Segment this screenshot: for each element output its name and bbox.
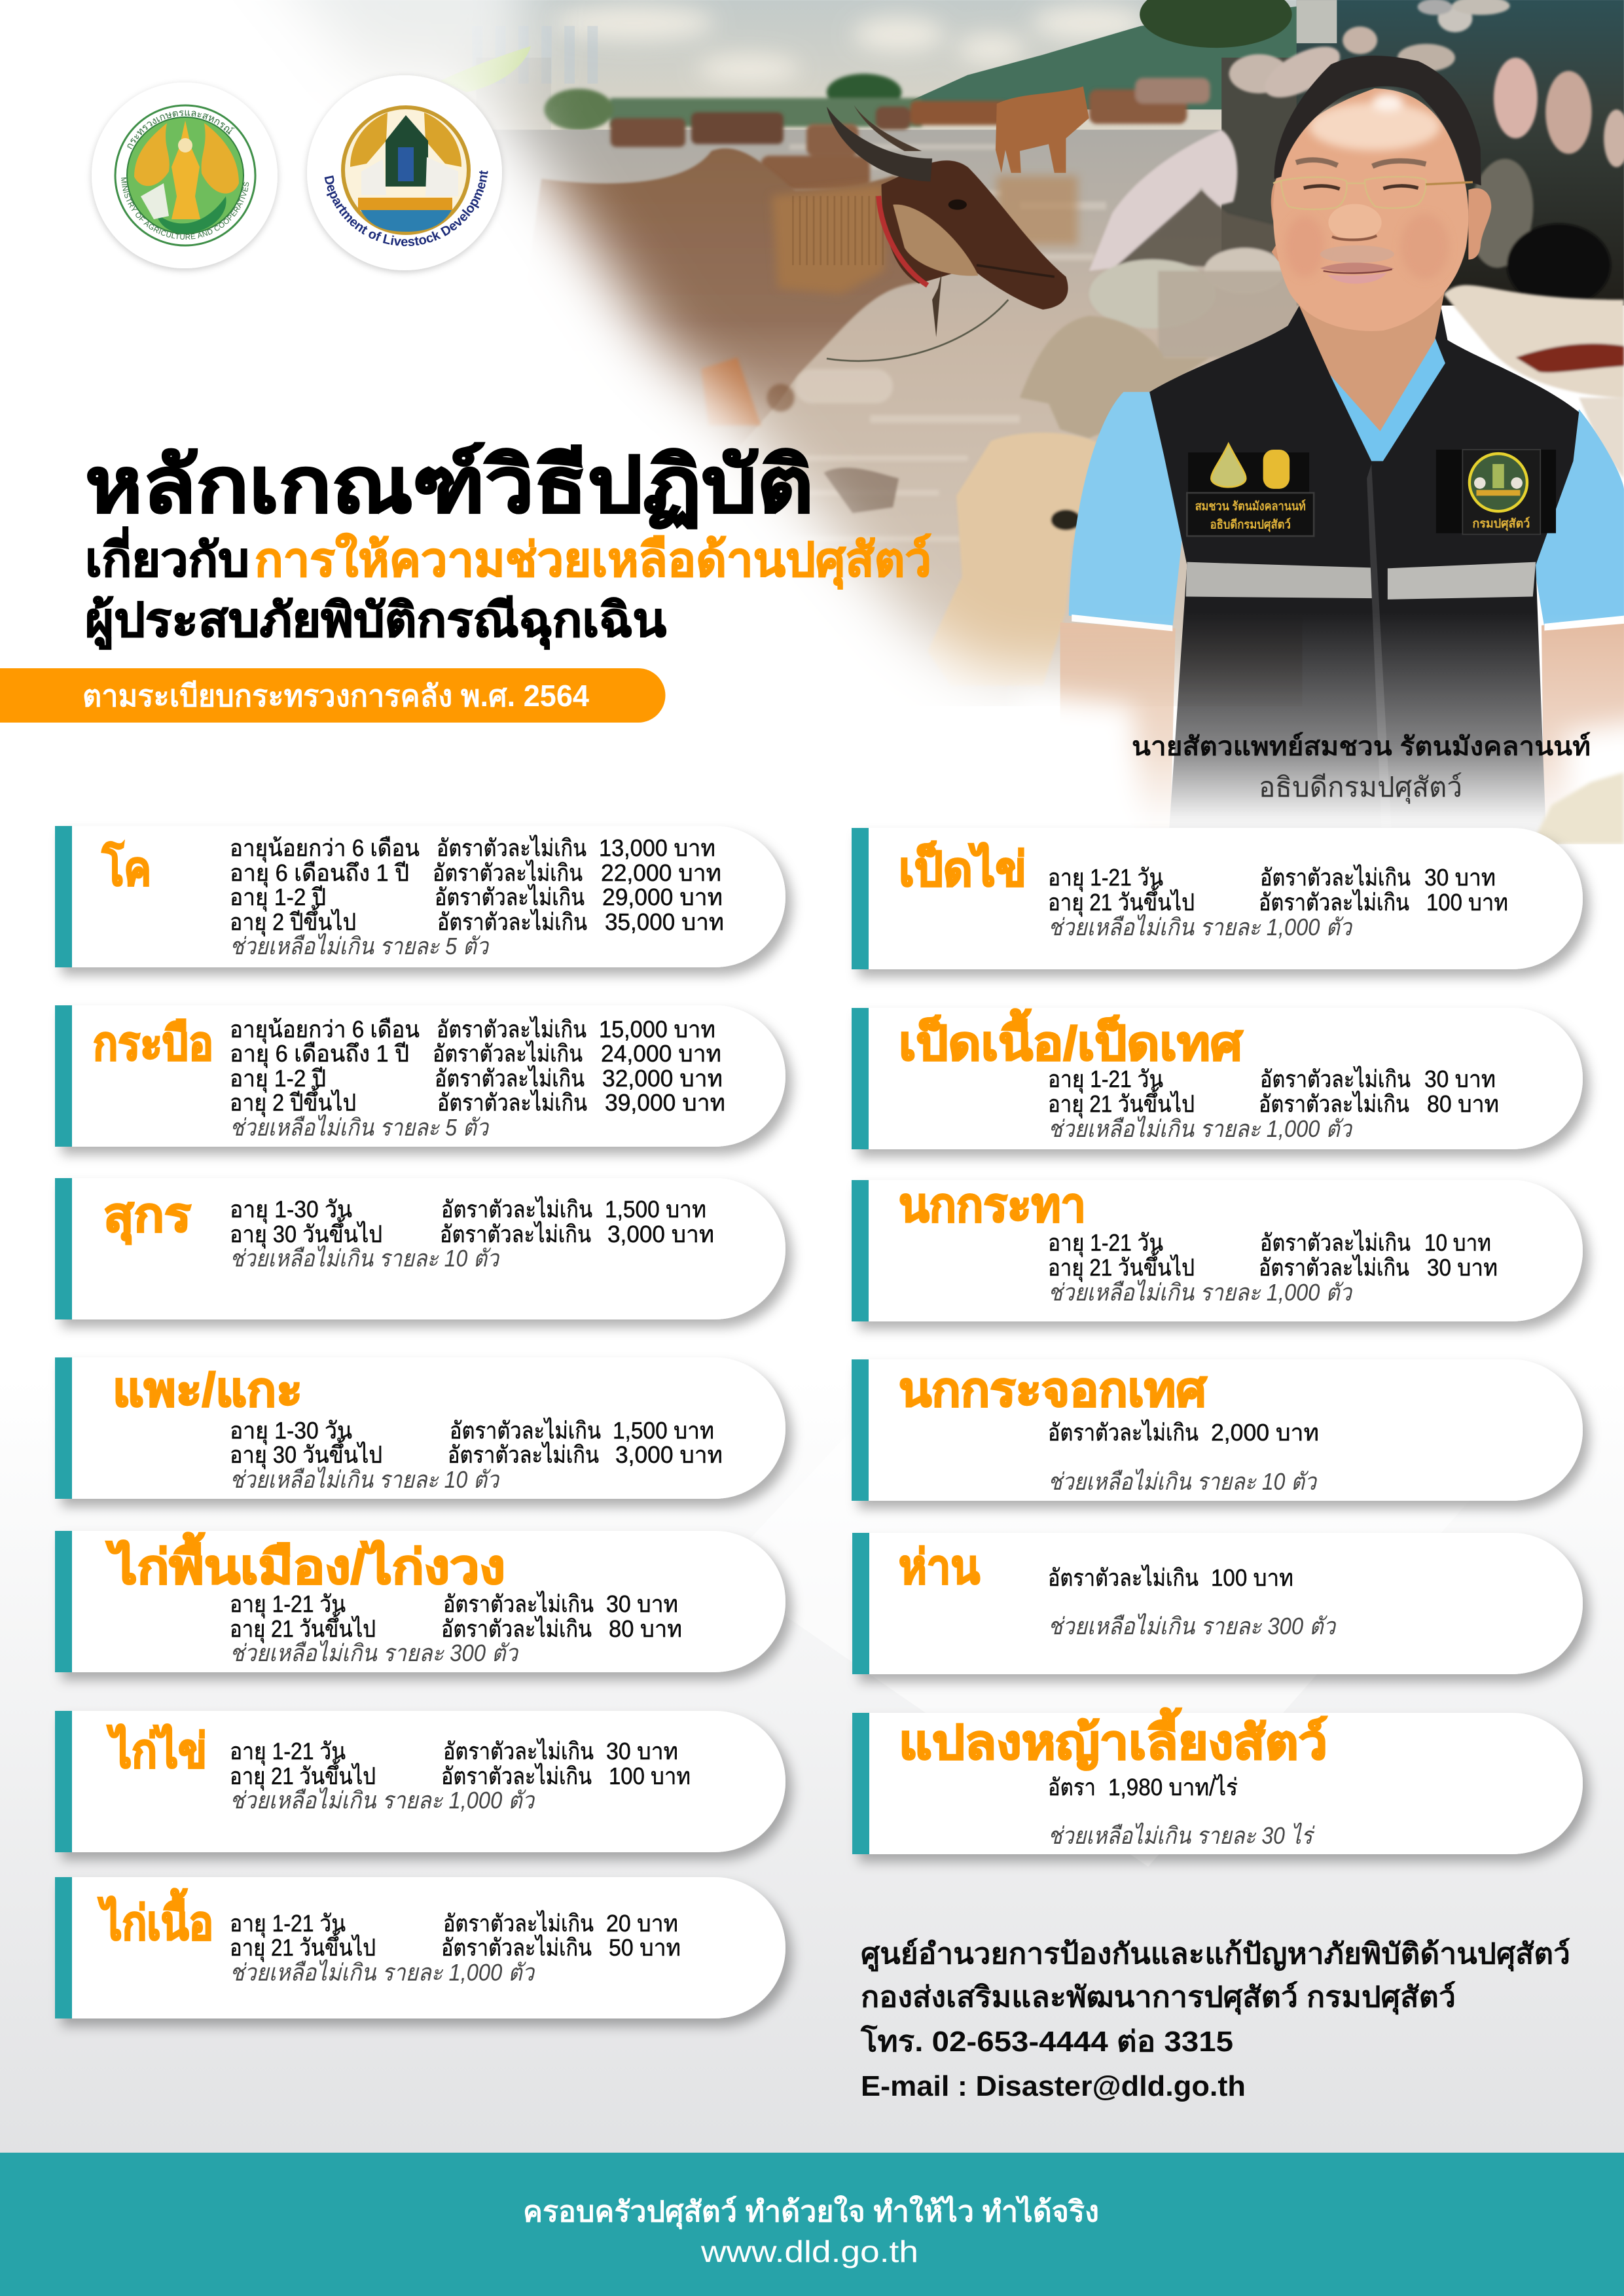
regulation banner: ตามระเบียบกระทรวงการคลัง พ.ศ. 2564 [82,679,589,713]
head [1271,56,1491,331]
panel: quail [852,1179,1583,1321]
heading: โค [101,840,151,895]
heading: เป็ดไข่ [899,841,1026,896]
director name and title: นายสัตวแพทย์สมชวน รัตนมังคลานนท์ [1132,732,1591,761]
panel: broilers [55,1877,785,2018]
heading: กระบือ [93,1018,213,1070]
rates: 30 บาท [606,1738,678,1765]
rates: 1,980 บาท/ไร่ [1108,1774,1238,1801]
panel: cattle [55,826,785,967]
rates: อายุ 21 วันขึ้นไป [1048,1086,1195,1119]
heading: ไก่พื้นเมือง/ไก่งวง [105,1532,505,1594]
hair [1274,56,1481,185]
name patch [1187,444,1314,536]
arm fade overlays [995,694,1624,864]
pigs on flooded pen [1229,0,1624,307]
rates: 50 บาท [609,1934,681,1961]
limit note: ช่วยเหลือไม่เกิน รายละ 10 ตัว [230,1466,500,1493]
limit note: ช่วยเหลือไม่เกิน รายละ 1,000 ตัว [230,1787,535,1814]
rates: อัตราตัวละไม่เกิน [441,1615,592,1642]
footer band: www.dld.go.th [700,2234,918,2269]
director name and title [1132,732,1591,804]
glasses [1273,177,1473,209]
heading: แปลงหญ้าเลี้ยงสัตว์ [899,1708,1327,1770]
rates: อัตราตัวละไม่เกิน [1048,1564,1199,1591]
forehead highlight [1285,94,1449,279]
limit note: ช่วยเหลือไม่เกิน รายละ 300 ตัว [230,1640,519,1666]
photo collage: flooded livestock [296,0,1624,706]
rates [230,1590,682,1643]
rates: 30 บาท [606,1590,678,1617]
rates: อายุ 1-21 วัน [1048,1066,1163,1094]
footer band: ครอบครัวปศุสัตว์ ทำด้วยใจ ทำให้ไว ทำได้จริง [523,2195,1099,2230]
brows [1296,160,1426,166]
subtitle line 1: เกี่ยวกับ [85,526,249,586]
hay bale [1532,772,1624,844]
rates: อายุน้อยกว่า 6 เดือน [230,1016,420,1044]
rates: อายุ 1-21 วัน [1048,864,1163,892]
rates: อายุ 6 เดือนถึง 1 ปี [230,1040,409,1068]
rates: อัตราตัวละไม่เกิน [1260,1229,1411,1256]
rates: อายุ 1-30 วัน [230,1417,352,1445]
rates: อัตราตัวละไม่เกิน [448,1441,599,1468]
rates: อายุ 6 เดือนถึง 1 ปี [230,859,409,888]
department patch: กรมปศุสัตว์ [1472,516,1530,531]
rates: 30 บาท [1424,1066,1496,1092]
rates: อายุ 21 วันขึ้นไป [230,1611,376,1643]
ears [1271,179,1491,262]
rates [1048,1419,1319,1446]
emblem: deity figure [134,120,239,234]
nose [1328,204,1382,241]
rates: อายุ 2 ปีขึ้นไป [230,905,356,937]
pig ear on right [1443,285,1624,478]
department patch [1436,450,1556,534]
rates: อายุ 2 ปีขึ้นไป [230,1085,356,1117]
rates: 80 บาท [609,1615,682,1642]
main title [85,442,931,650]
shirt sleeves [1069,392,1624,631]
panel: laying ducks [852,828,1583,969]
name patch: อธิบดีกรมปศุสัตว์ [1210,518,1291,533]
rates: 1,500 บาท [605,1196,706,1223]
rates [1048,1774,1238,1801]
logo: Department of Livestock Development [304,75,505,275]
rates: 2,000 บาท [1211,1419,1319,1446]
rates: อายุ 1-21 วัน [1048,1229,1163,1257]
brown cow in river [996,86,1089,245]
eyes [1304,186,1418,189]
logo: Department of Livestock Development: Department of Livestock Development [325,170,488,246]
limit note: ช่วยเหลือไม่เกิน รายละ 5 ตัว [230,1114,490,1141]
rates [230,1738,691,1791]
foreground cattle heads [824,316,1210,686]
rates: 10 บาท [1424,1229,1491,1256]
zipper [1367,464,1394,865]
rates: อายุน้อยกว่า 6 เดือน [230,834,420,863]
heading: ไก่ไข่ [107,1723,207,1778]
rates: อัตราตัวละไม่เกิน [433,859,583,886]
reflective stripe [1186,562,1536,600]
panel: meat and muscovy ducks [852,1008,1583,1149]
footer band [0,2153,1624,2296]
rates: อายุ 1-21 วัน [230,1590,346,1619]
rates: อายุ 1-2 ปี [230,1065,326,1093]
rates: 35,000 บาท [605,908,724,935]
limit note: ช่วยเหลือไม่เกิน รายละ 10 ตัว [1048,1468,1318,1495]
rates: อัตราตัวละไม่เกิน [443,1910,594,1937]
rates: 80 บาท [1427,1090,1499,1117]
limit note: ช่วยเหลือไม่เกิน รายละ 1,000 ตัว [1048,1279,1353,1306]
rates [230,1016,725,1117]
rates: 30 บาท [1427,1254,1498,1281]
rates: อายุ 21 วันขึ้นไป [230,1759,376,1791]
rates: 3,000 บาท [607,1221,714,1247]
contact block [860,1937,1570,2102]
distant cattle herd [611,78,1210,190]
rates: อายุ 21 วันขึ้นไป [1048,885,1195,917]
rates: อัตราตัวละไม่เกิน [450,1417,601,1444]
limit note: ช่วยเหลือไม่เกิน รายละ 30 ไร่ [1048,1822,1315,1849]
rates: อัตราตัวละไม่เกิน [441,1763,592,1789]
heading: สุกร [103,1189,191,1245]
rates: อายุ 21 วันขึ้นไป [230,1930,376,1962]
rates: อัตราตัวละไม่เกิน [441,1934,592,1961]
limit note: ช่วยเหลือไม่เกิน รายละ 1,000 ตัว [1048,914,1353,941]
rates: อัตราตัวละไม่เกิน [443,1590,594,1617]
rescue workers in orange [701,357,795,425]
heading: ไก่เนื้อ [98,1888,213,1950]
shirt collar and neck [1297,288,1445,461]
rates: 100 บาท [1426,889,1508,916]
contact block: กองส่งเสริมและพัฒนาการปศุสัตว์ กรมปศุสัตว์ [861,1981,1456,2015]
rates [230,1196,714,1249]
heading: เป็ดเนื้อ/เป็ดเทศ [899,1009,1243,1070]
name patch: สมชวน รัตนมังคลานนท์ [1195,499,1306,512]
rates: 100 บาท [1211,1564,1293,1591]
contact block: ศูนย์อำนวยการป้องกันและแก้ปัญหาภัยพิบัติด้านปศุสัตว์ [861,1937,1570,1972]
rates: 1,500 บาท [613,1417,714,1444]
director name and title: อธิบดีกรมปศุสัตว์ [1259,772,1462,804]
logo: Ministry of Agriculture and Cooperatives: MINISTRY OF AGRICULTURE AND COOPERATIVES [121,177,249,240]
limit note: ช่วยเหลือไม่เกิน รายละ 300 ตัว [1048,1613,1337,1640]
rates: 100 บาท [609,1763,691,1789]
portrait of director [1060,56,1624,865]
rates: อายุ 1-21 วัน [230,1738,346,1766]
emblem: shrine, horses and water [350,113,461,232]
rates: อัตราตัวละไม่เกิน [435,884,585,910]
subtitle line 2: ผู้ประสบภัยพิบัติกรณีฉุกเฉิน [85,594,666,650]
rates: อัตราตัวละไม่เกิน [1259,1090,1409,1117]
rates: 13,000 บาท [599,834,715,861]
rates: อัตราตัวละไม่เกิน [1259,1254,1409,1281]
contact block: E-mail : Disaster@dld.go.th [861,2070,1246,2102]
limit note: ช่วยเหลือไม่เกิน รายละ 10 ตัว [230,1245,500,1272]
rates: อายุ 1-21 วัน [230,1910,346,1938]
rates [1048,864,1508,917]
rates: 32,000 บาท [602,1065,723,1092]
limit note: ช่วยเหลือไม่เกิน รายละ 1,000 ตัว [1048,1115,1353,1142]
rates: อัตราตัวละไม่เกิน [440,1221,591,1247]
rates: 39,000 บาท [605,1089,725,1116]
panel: goats and sheep [55,1357,785,1499]
rates: อัตราตัวละไม่เกิน [441,1196,592,1223]
panel: swine [55,1178,785,1319]
rates: 22,000 บาท [601,859,721,886]
subtitle line 1 [85,526,931,590]
rates: 29,000 บาท [602,884,723,910]
rates: อัตราตัวละไม่เกิน [1048,1419,1199,1446]
rates [230,1417,723,1469]
face [1273,88,1468,331]
panel: laying hens [55,1711,785,1852]
rates [1048,1229,1498,1282]
subtitle line 1: การให้ความช่วยเหลือด้านปศุสัตว์ [255,532,931,590]
river ripples [755,144,1106,542]
logo: Ministry of Agriculture and Cooperatives: กระทรวงเกษตรและสหกรณ์ [127,110,235,149]
rates: อายุ 1-30 วัน [230,1196,352,1224]
vest [1149,306,1579,865]
panel: goose [852,1533,1583,1674]
rates: 30 บาท [1424,864,1496,891]
moustache shadow [1320,245,1394,263]
rates: อัตราตัวละไม่เกิน [437,1016,586,1043]
rates: 20 บาท [606,1910,678,1937]
heading: นกกระทา [899,1179,1086,1232]
rates: อัตราตัวละไม่เกิน [1260,1066,1411,1092]
rates: อัตราตัวละไม่เกิน [443,1738,594,1765]
rates: อัตราตัวละไม่เกิน [435,1065,585,1092]
rates: 3,000 บาท [615,1441,723,1468]
rates: อัตรา [1048,1774,1096,1801]
contact block: โทร. 02-653-4444 ต่อ 3315 [860,2024,1233,2058]
big pale pig [1089,130,1308,357]
panel: native chicken and turkey [55,1531,785,1672]
rates: อายุ 1-2 ปี [230,884,326,912]
rates: อัตราตัวละไม่เกิน [437,834,586,861]
mouth [1320,262,1394,283]
logo: Ministry of Agriculture and Cooperatives [89,81,280,274]
limit note: ช่วยเหลือไม่เกิน รายละ 5 ตัว [230,933,490,960]
rates: อายุ 21 วันขึ้นไป [1048,1250,1195,1282]
panel: pasture [852,1708,1583,1854]
rates: อายุ 30 วันขึ้นไป [230,1217,382,1249]
heading: ห่าน [899,1541,980,1594]
rates: อัตราตัวละไม่เกิน [437,1089,587,1116]
rates [230,834,724,937]
panel: buffalo [55,1005,785,1147]
panel: ostrich [852,1359,1583,1501]
rates: อายุ 30 วันขึ้นไป [230,1437,382,1469]
rates: อัตราตัวละไม่เกิน [433,1040,583,1067]
rates: 15,000 บาท [599,1016,715,1043]
rates: อัตราตัวละไม่เกิน [437,908,587,935]
rates: อัตราตัวละไม่เกิน [1260,864,1411,891]
rates [1048,1066,1499,1119]
buffalo [537,105,1068,437]
heading: แพะ/แกะ [113,1364,302,1416]
rates: อัตราตัวละไม่เกิน [1259,889,1409,916]
arms [1060,617,1624,865]
limit note: ช่วยเหลือไม่เกิน รายละ 1,000 ตัว [230,1959,535,1986]
regulation banner [0,668,665,723]
heading: นกกระจอกเทศ [899,1364,1207,1416]
rates [230,1910,681,1962]
main title: หลักเกณฑ์วิธีปฏิบัติ [85,442,814,529]
rates: 24,000 บาท [601,1040,721,1067]
